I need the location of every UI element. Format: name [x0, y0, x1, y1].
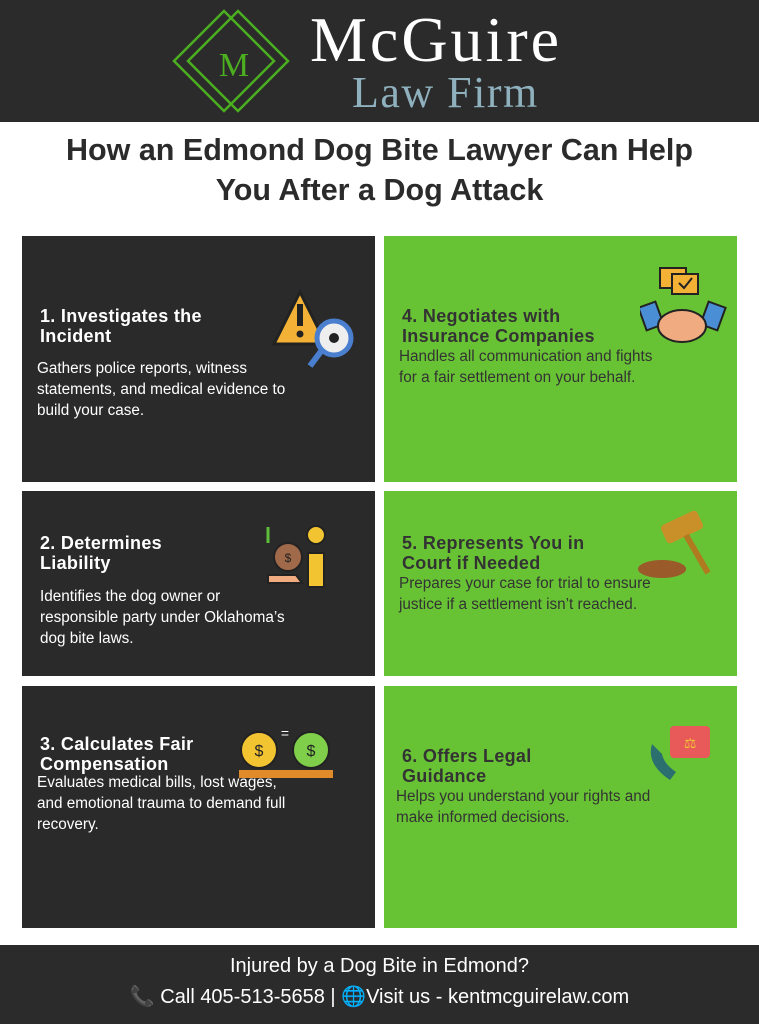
panel: 5 represents in court	[384, 491, 737, 676]
icon: phone with scales: ⚖	[684, 735, 696, 751]
panel: 1 investigates: Incident	[40, 326, 111, 346]
logo icon	[172, 9, 290, 113]
panel: 2 determines liability: Liability	[40, 553, 111, 573]
panel: 1 investigates: 1. Investigates the	[40, 306, 202, 326]
icon: warning magnifier	[272, 290, 354, 368]
panel: 4 negotiates: 4. Negotiates with	[402, 306, 560, 326]
panel: 4 negotiates	[384, 236, 737, 482]
title: You After a Dog Attack	[216, 173, 543, 207]
panel: 3 calculates: 3. Calculates Fair	[40, 734, 193, 754]
icon: money scale	[239, 725, 333, 778]
footer: 📞 Call 405-513-5658 | 🌐Visit us - kentmcguirelaw.com	[130, 986, 629, 1008]
panel: 6 legal guidance	[384, 686, 737, 928]
panel: 3 calculates: recovery.	[37, 816, 99, 833]
title	[66, 133, 693, 207]
panel: 2 determines liability: dog bite laws.	[40, 630, 134, 647]
footer	[0, 945, 759, 1024]
footer: Injured by a Dog Bite in Edmond?	[230, 955, 529, 977]
logo text	[310, 4, 562, 117]
panel: 6 legal guidance: Guidance	[402, 766, 486, 786]
logo icon: M	[219, 47, 249, 84]
logo text: McGuire	[310, 4, 562, 75]
icon: money scale: =	[281, 725, 289, 741]
panel: 3 calculates: and emotional trauma to demand full	[37, 795, 285, 812]
icon: money bag: $	[285, 551, 292, 565]
panel: 5 represents in court: Court if Needed	[402, 553, 541, 573]
panel: 3 calculates: Compensation	[40, 754, 169, 774]
icon: money bag	[266, 525, 324, 586]
panel: 1 investigates	[22, 236, 375, 482]
panel: 1 investigates: build your case.	[37, 402, 144, 419]
panel: 5 represents in court: Prepares your case for trial to ensure	[399, 575, 651, 592]
header bar	[0, 0, 759, 122]
panel: 1 investigates: statements, and medical evidence to	[37, 381, 285, 398]
panel: 2 determines liability: responsible party under Oklahoma’s	[40, 609, 285, 626]
panel: 5 represents in court: justice if a settlement isn’t reached.	[399, 596, 637, 613]
panel: 4 negotiates: for a fair settlement on your behalf.	[399, 369, 635, 386]
panel: 1 investigates: Gathers police reports, witness	[37, 360, 247, 377]
panel: 2 determines liability: 2. Determines	[40, 533, 162, 553]
icon: money scale: $	[255, 743, 264, 760]
icon: handshake	[640, 267, 727, 343]
panel: 6 legal guidance: make informed decisions.	[396, 809, 569, 826]
logo text: Law Firm	[352, 68, 539, 117]
panel: 4 negotiates: Handles all communication and fights	[399, 348, 652, 365]
icon: phone with scales	[650, 726, 710, 780]
panel: 2 determines liability	[22, 491, 375, 676]
panel: 3 calculates	[22, 686, 375, 928]
panel: 6 legal guidance: Helps you understand your rights and	[396, 788, 650, 805]
panel: 3 calculates: Evaluates medical bills, lost wages,	[37, 774, 277, 791]
title: How an Edmond Dog Bite Lawyer Can Help	[66, 133, 693, 167]
panel: 6 legal guidance: 6. Offers Legal	[402, 746, 532, 766]
icon: money scale: $	[307, 743, 316, 760]
icon: gavel	[638, 510, 710, 578]
panel: 5 represents in court: 5. Represents You in	[402, 533, 584, 553]
panel: 4 negotiates: Insurance Companies	[402, 326, 595, 346]
panel: 2 determines liability: Identifies the dog owner or	[40, 588, 220, 605]
